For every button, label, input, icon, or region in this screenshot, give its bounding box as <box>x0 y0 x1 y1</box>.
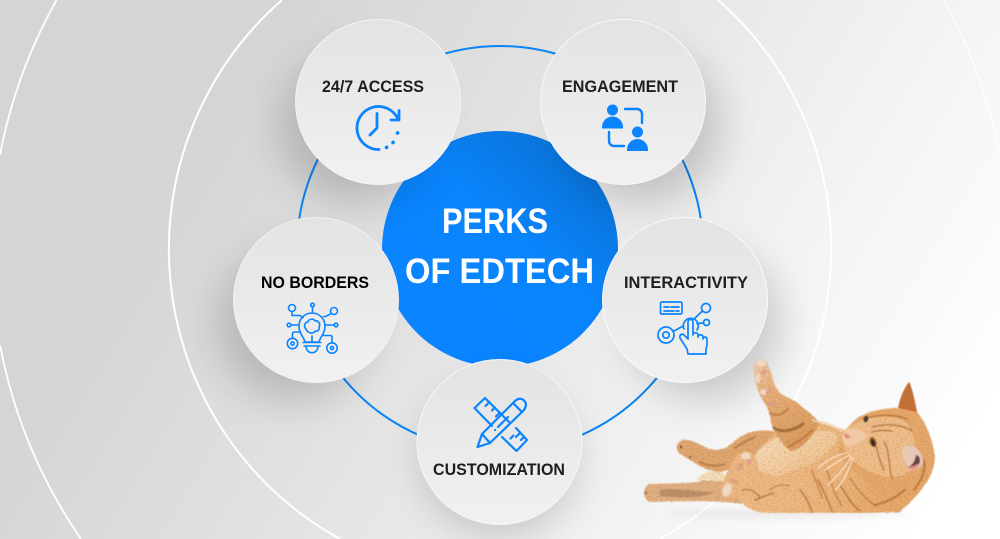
head <box>839 382 935 513</box>
label: customization: CUSTOMIZATION <box>433 461 565 479</box>
cat <box>644 359 935 517</box>
center title: OF EDTECH <box>405 252 594 291</box>
torso <box>739 421 905 513</box>
panel: customization <box>417 360 582 524</box>
icon: touch hand with nodes <box>658 302 710 354</box>
center title: PERKS <box>442 202 548 241</box>
near hind leg <box>677 430 780 472</box>
toe pads <box>729 369 777 485</box>
whiskers <box>812 420 853 490</box>
face patch <box>843 417 915 477</box>
dark claws <box>645 446 691 494</box>
hidden cream paw <box>697 471 730 482</box>
raised front leg <box>754 359 820 451</box>
label: interactivity: INTERACTIVITY <box>624 274 748 292</box>
blue connecting ring <box>297 46 703 452</box>
panel: interactivity <box>602 218 768 382</box>
cat floor shadow <box>665 511 915 517</box>
icon: clock with arrow <box>357 107 399 150</box>
label: 24/7 access: 24/7 ACCESS <box>322 78 424 96</box>
disc shadows <box>218 50 781 536</box>
panel: 24/7 access <box>296 20 460 184</box>
label: no borders: NO BORDERS <box>261 274 369 292</box>
nose <box>845 433 851 438</box>
far hind leg <box>644 475 760 504</box>
fur stripes <box>700 409 925 512</box>
cat body <box>644 359 935 513</box>
panel: no borders <box>234 218 398 382</box>
panel: engagement <box>540 20 706 184</box>
eyes <box>863 415 869 423</box>
icon: light bulb with brain <box>287 303 338 353</box>
icon: two people exchanging <box>602 104 648 151</box>
cat details <box>645 360 925 512</box>
ear <box>898 382 917 412</box>
center title <box>405 202 594 291</box>
pale paw toes <box>720 360 768 498</box>
icon: ruler and pencil <box>474 398 527 451</box>
muzzle <box>842 428 868 446</box>
inner ear <box>902 446 923 470</box>
center circle <box>382 131 618 367</box>
front paw and forearm <box>722 451 812 513</box>
label: engagement: ENGAGEMENT <box>562 78 678 96</box>
chest highlight <box>755 431 837 480</box>
